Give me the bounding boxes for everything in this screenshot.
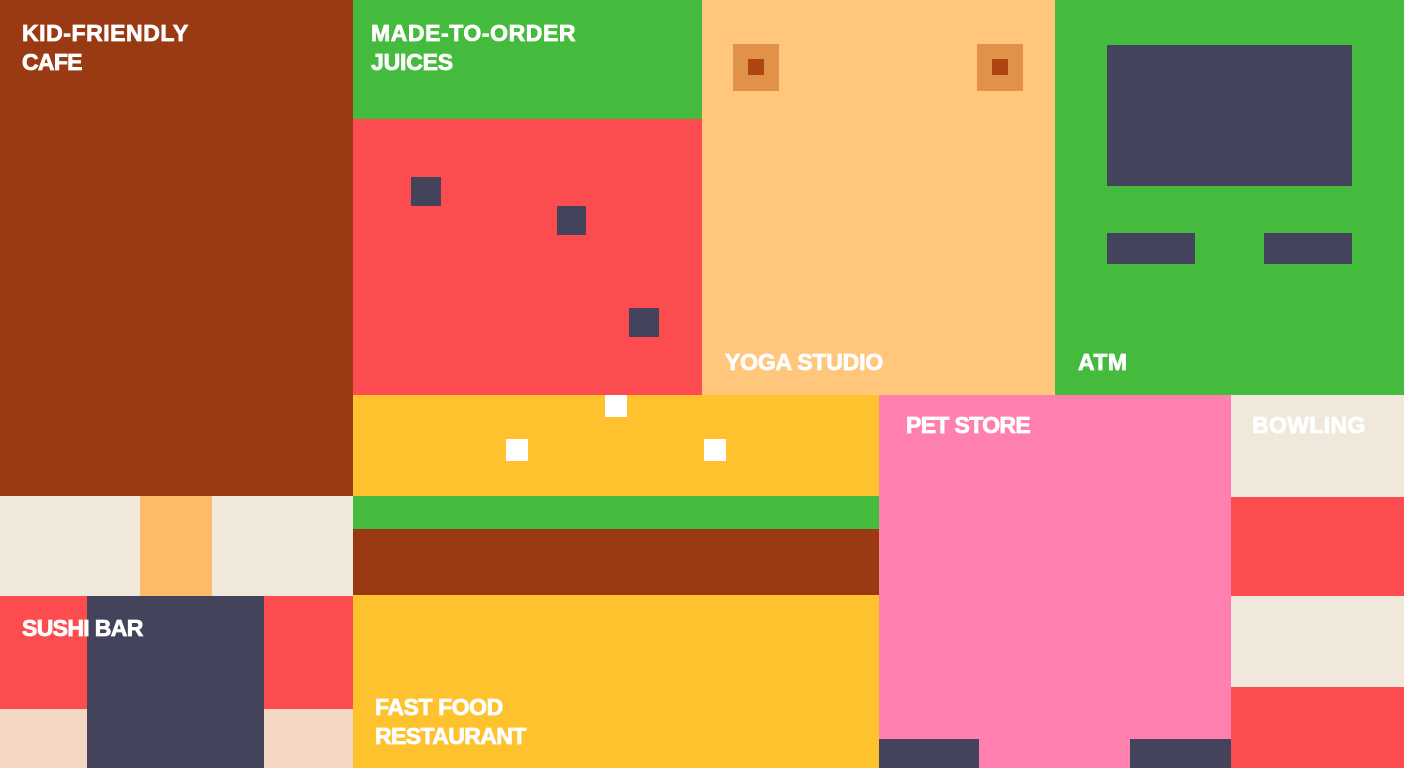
heading: fast food restaurant: RESTAURANT	[375, 723, 526, 749]
juice green header	[353, 0, 702, 119]
panel: fast food restaurant	[353, 395, 879, 768]
atm screen	[1107, 45, 1352, 186]
lettuce band	[353, 496, 879, 529]
seed 1	[411, 177, 441, 206]
heading: pet store: PET STORE	[906, 412, 1030, 438]
sushi dark block	[87, 596, 264, 768]
sesame seed top	[605, 395, 627, 417]
heading: made-to-order juices: MADE-TO-ORDER	[371, 20, 576, 46]
heading: kid-friendly cafe: KID-FRIENDLY	[22, 20, 189, 46]
panel: atm	[1055, 0, 1404, 395]
red stripe upper	[1231, 497, 1404, 596]
sushi left base	[0, 709, 87, 768]
heading: fast food restaurant	[375, 694, 526, 749]
seed 2	[557, 206, 586, 235]
sesame seed left	[506, 439, 528, 461]
heading: bowling: BOWLING	[1252, 412, 1366, 438]
seed 3	[629, 308, 659, 337]
right square centre	[992, 59, 1008, 75]
panel: bowling	[1231, 395, 1404, 768]
sesame seed right	[704, 439, 726, 461]
left square	[733, 44, 779, 91]
heading: atm: ATM	[1078, 349, 1127, 375]
panel: yoga studio	[702, 0, 1055, 395]
atm right button	[1264, 233, 1352, 264]
atm left button	[1107, 233, 1195, 264]
left square centre	[748, 59, 764, 75]
heading: made-to-order juices: JUICES	[371, 49, 453, 75]
red stripe lower	[1231, 687, 1404, 768]
cafe cream band	[0, 496, 353, 596]
left paw	[879, 739, 979, 768]
right square	[977, 44, 1023, 91]
heading: made-to-order juices	[370, 20, 576, 75]
cafe orange stripe	[140, 496, 212, 596]
right paw	[1130, 739, 1231, 768]
heading: kid-friendly cafe	[22, 20, 189, 75]
panel: sushi bar	[0, 596, 353, 768]
panel: made-to-order juices	[353, 0, 702, 395]
heading: yoga studio: YOGA STUDIO	[725, 349, 883, 375]
heading: kid-friendly cafe: CAFE	[22, 49, 82, 75]
panel: pet store	[879, 395, 1231, 768]
panel: kid-friendly cafe	[0, 0, 353, 596]
heading: fast food restaurant: FAST FOOD	[375, 694, 503, 720]
patty band	[353, 529, 879, 595]
sushi right base	[264, 709, 353, 768]
heading: sushi bar: SUSHI BAR	[22, 615, 143, 641]
cafe brown block	[0, 0, 353, 496]
